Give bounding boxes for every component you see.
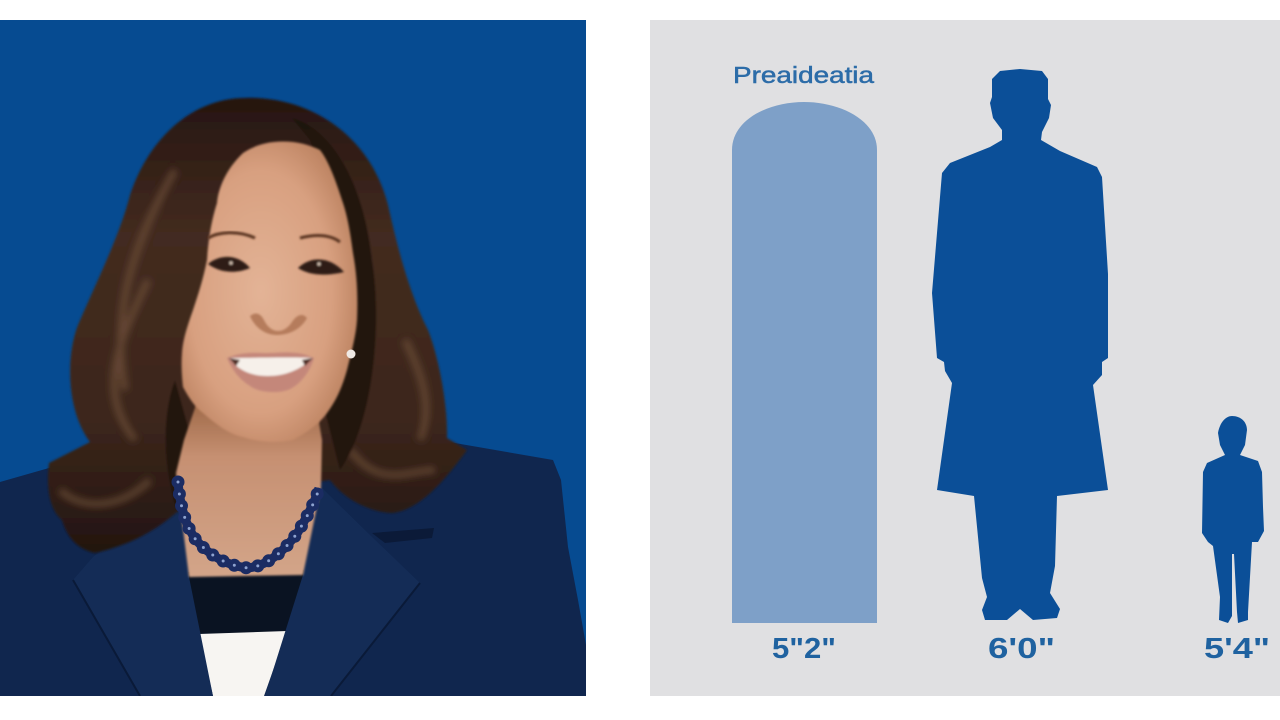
label: 5'2": 5"2" [772,633,836,665]
portrait: smile [227,352,314,392]
portrait background [0,20,586,696]
portrait: eyes and brows [208,233,344,275]
portrait: black top [186,570,306,634]
portrait: left lapel [186,572,213,696]
silhouette: tall figure [932,69,1108,620]
portrait: collar notch [372,528,434,543]
portrait: hair [48,98,467,553]
label: 6'0": 6'0" [988,633,1055,665]
portrait: jacket [0,440,586,696]
portrait: nose [250,314,307,335]
silhouette: small figure [1202,416,1264,623]
panel: portrait [0,20,586,696]
hair highlights [60,170,435,504]
heading: Preaideatia [733,62,874,88]
portrait: white blouse [199,631,287,696]
panel: height comparison [650,20,1280,696]
bar: 5'2" column [732,102,877,623]
label: 5'4": 5'4" [1204,633,1270,665]
portrait: right lapel [270,570,306,678]
portrait: necklace [178,482,319,568]
portrait: earring [346,350,356,358]
portrait: neck and chest [176,405,322,577]
portrait: face [182,142,357,442]
panel background [650,20,1280,696]
